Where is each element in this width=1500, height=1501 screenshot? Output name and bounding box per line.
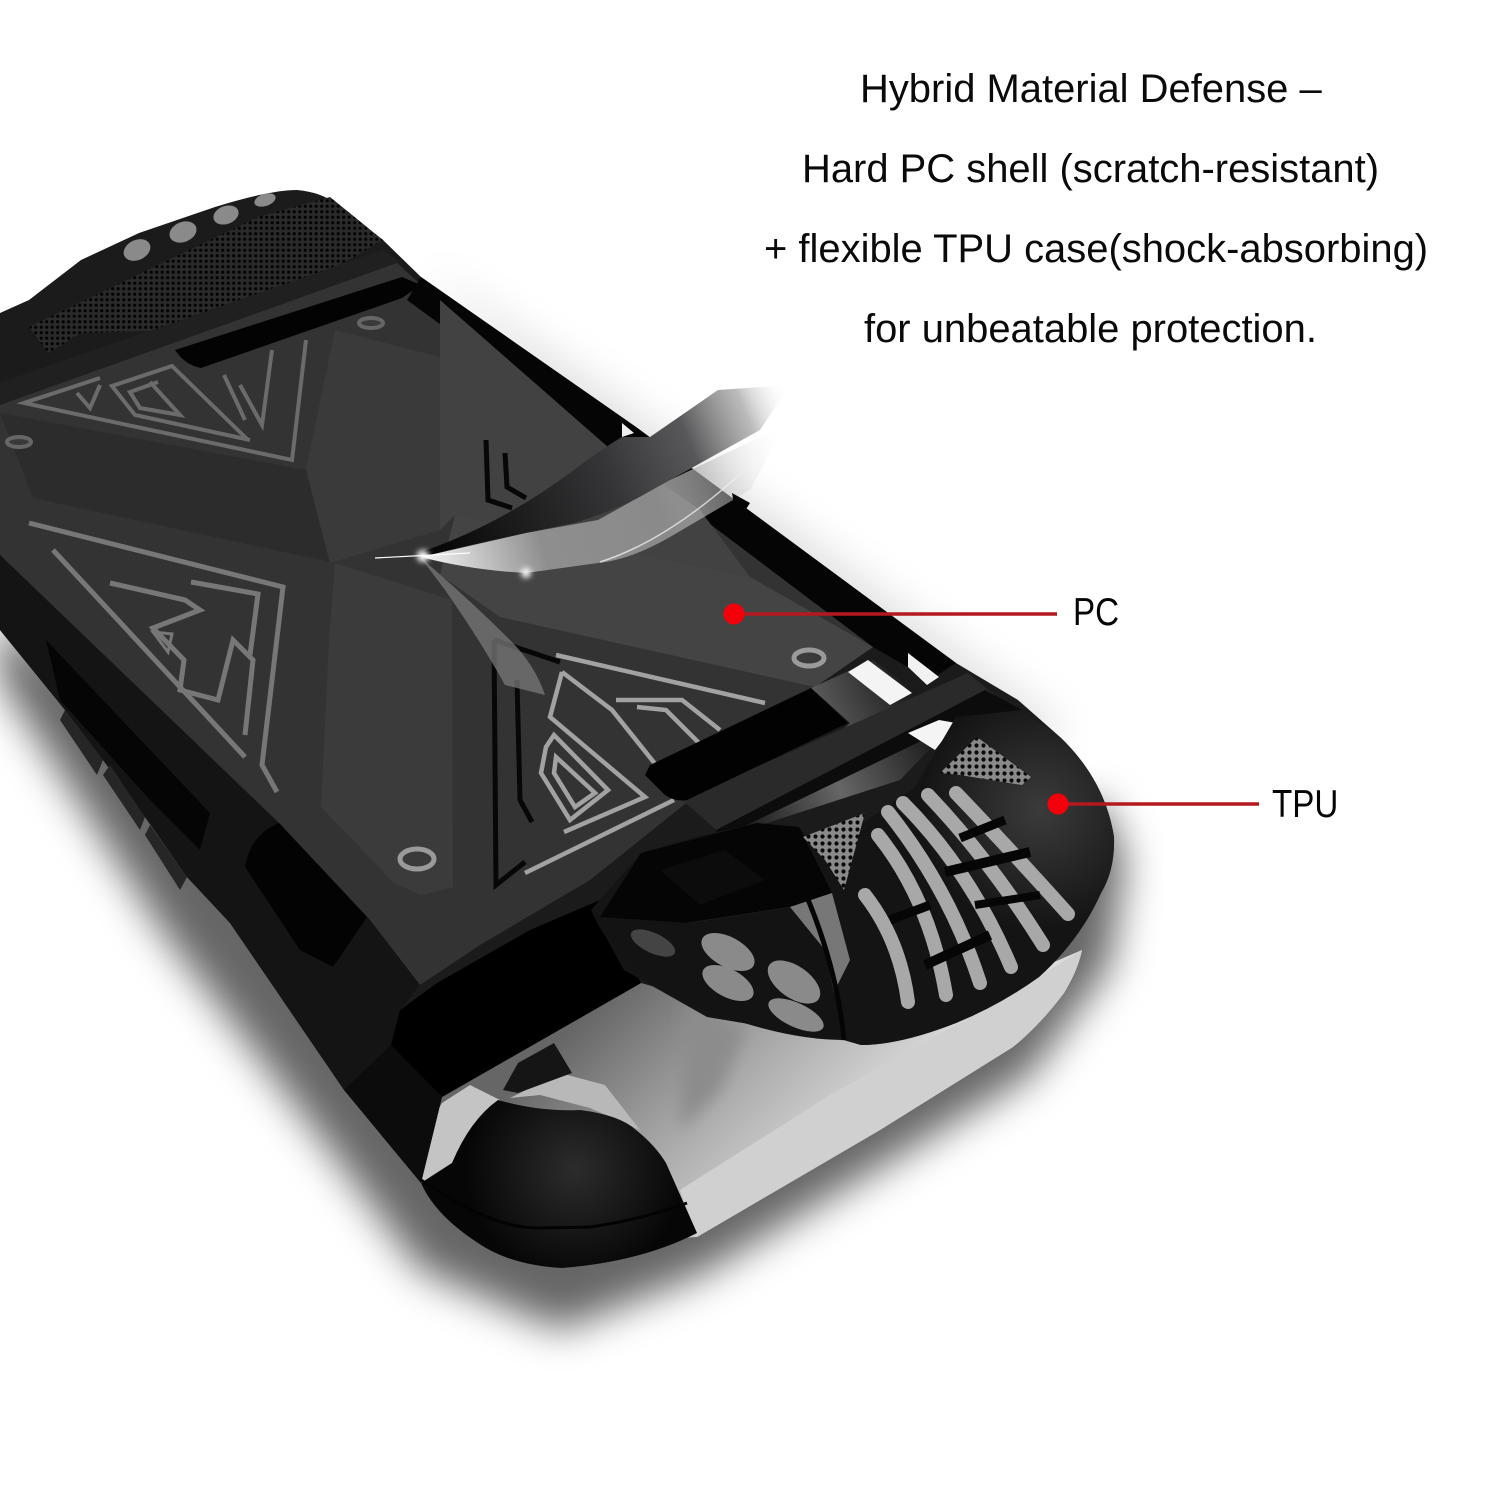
back panel surface — [0, 250, 873, 985]
heading text — [764, 67, 1428, 351]
triangular maze pattern upper — [24, 340, 306, 460]
console white underside — [411, 950, 1082, 1240]
triangular maze pattern left — [29, 523, 283, 792]
bottom black bar — [344, 900, 641, 1183]
left lobe — [591, 823, 850, 1040]
label: PC: PC — [1073, 591, 1119, 634]
label: TPU: TPU — [1272, 783, 1338, 826]
vent slots — [865, 793, 1068, 1002]
top frame slots — [175, 277, 956, 685]
strap and dark slot — [645, 660, 1022, 838]
heading text: Hard PC shell (scratch-resistant) — [802, 147, 1379, 191]
TPU callout line — [1048, 794, 1259, 814]
heading text: + flexible TPU case(shock-absorbing) — [764, 227, 1428, 271]
triangular maze pattern right — [525, 655, 765, 873]
TPU grip with slots — [591, 710, 1114, 1045]
PC callout line — [724, 604, 1057, 624]
top grip vents — [0, 191, 400, 405]
maze fragment and black outline right — [486, 440, 560, 885]
ground shadow — [0, 270, 1125, 1330]
lower left black grip — [421, 1043, 697, 1268]
screws — [7, 318, 824, 869]
vent shadow bands — [890, 820, 1040, 965]
sparkle highlight — [375, 550, 531, 578]
left side buttons and slot — [46, 640, 367, 967]
peeled protective film — [421, 385, 790, 695]
case main body — [0, 190, 1114, 1183]
raised PC plates — [0, 300, 873, 895]
heading text: for unbeatable protection. — [864, 307, 1317, 351]
heading text: Hybrid Material Defense – — [860, 67, 1322, 111]
